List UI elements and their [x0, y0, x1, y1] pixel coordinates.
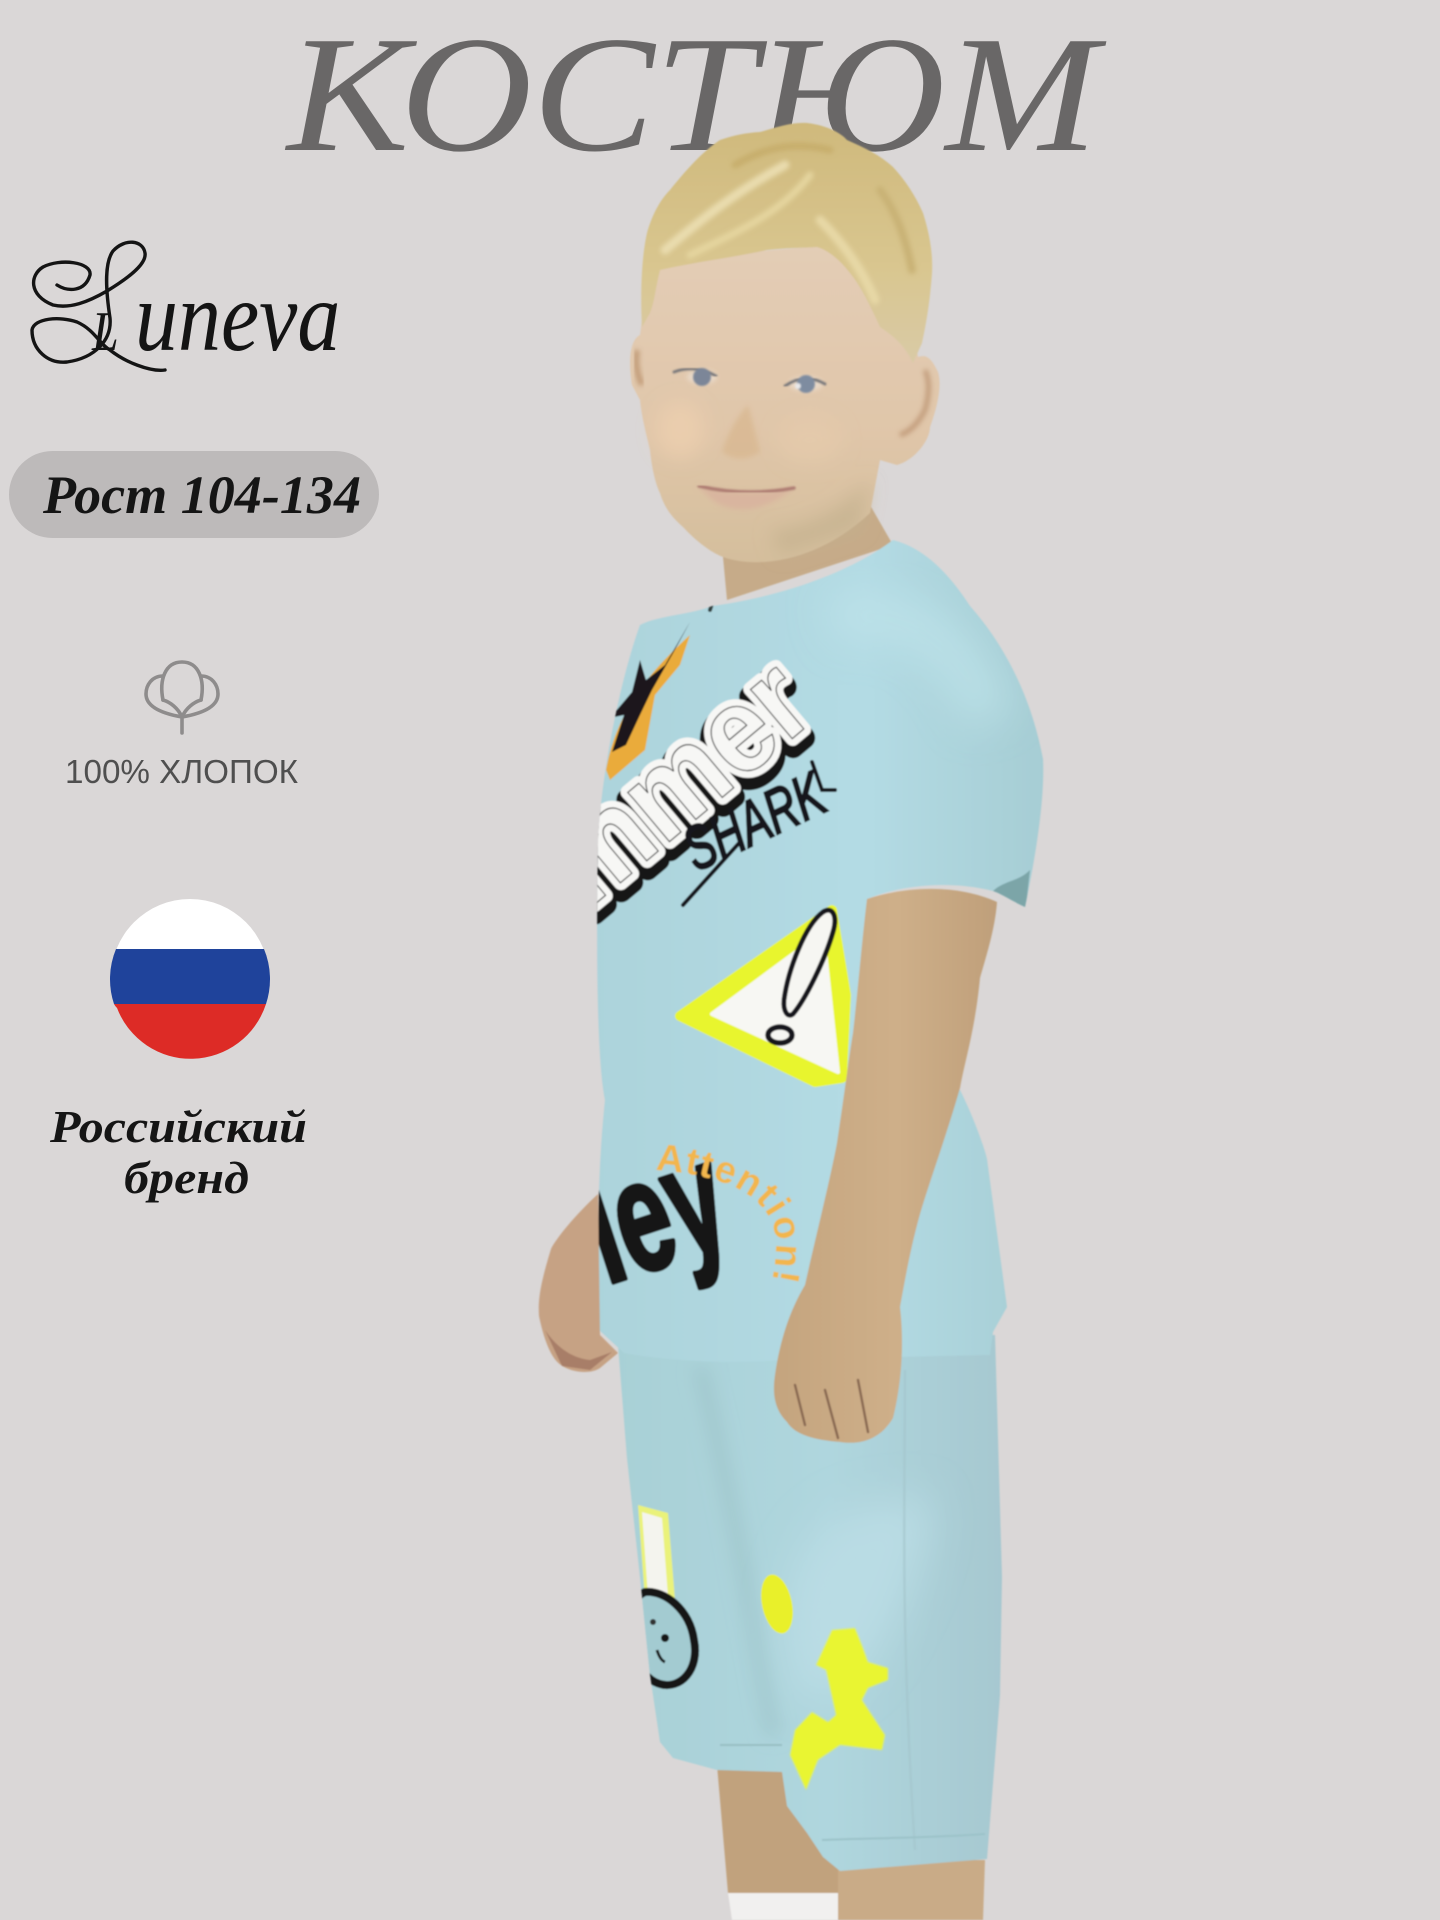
hey graffiti: Hey — [521, 1107, 747, 1330]
height badge — [9, 451, 379, 538]
left arm and hand — [539, 1194, 618, 1372]
brand logo: uneva — [135, 262, 340, 372]
cotton label: 100% ХЛОПОК — [65, 753, 299, 790]
face — [630, 240, 940, 562]
hair — [641, 123, 932, 363]
icon: russian flag — [110, 899, 270, 1059]
attention lettering: Attention! — [656, 1144, 800, 1282]
infographic canvas — [9, 40, 1106, 1920]
summer bubble lettering: mmer — [517, 632, 836, 930]
shorts — [618, 1335, 1002, 1871]
ears — [900, 370, 928, 435]
neon paint splash — [790, 1628, 888, 1790]
head — [630, 123, 940, 562]
legs and socks — [717, 1765, 985, 1920]
smiley cloud print — [630, 1592, 695, 1685]
neck — [723, 505, 893, 600]
icon: cotton — [146, 662, 218, 733]
shorts patch — [638, 1505, 675, 1600]
shark lettering — [673, 759, 838, 905]
boy wearing the suit — [538, 122, 1044, 1920]
summer bubble lettering — [596, 659, 816, 925]
right arm and hand — [774, 889, 997, 1443]
nose — [722, 405, 760, 458]
warning triangle print — [680, 910, 846, 1082]
eyes — [674, 368, 825, 393]
height badge: Рост 104-134 — [42, 465, 361, 525]
bee print — [606, 622, 690, 780]
cheek shading — [656, 402, 870, 555]
brand origin caption: бренд — [124, 1152, 249, 1203]
title: КОСТЮМ — [285, 2, 1107, 186]
summer bubble lettering: mmer — [517, 632, 836, 930]
brand origin caption: Российский — [49, 1101, 307, 1152]
t-shirt — [596, 540, 1044, 1356]
summer bubble lettering: mmer — [517, 640, 836, 938]
hair highlights — [665, 146, 912, 300]
collar seam — [707, 605, 714, 613]
brand logo — [32, 242, 340, 372]
shark lettering: SHARK — [673, 759, 838, 885]
brand origin caption — [49, 1101, 307, 1203]
neon paint dot — [756, 1572, 798, 1636]
brand logo: L — [91, 302, 119, 363]
mouth — [697, 486, 795, 509]
sleeve shading — [903, 616, 994, 709]
